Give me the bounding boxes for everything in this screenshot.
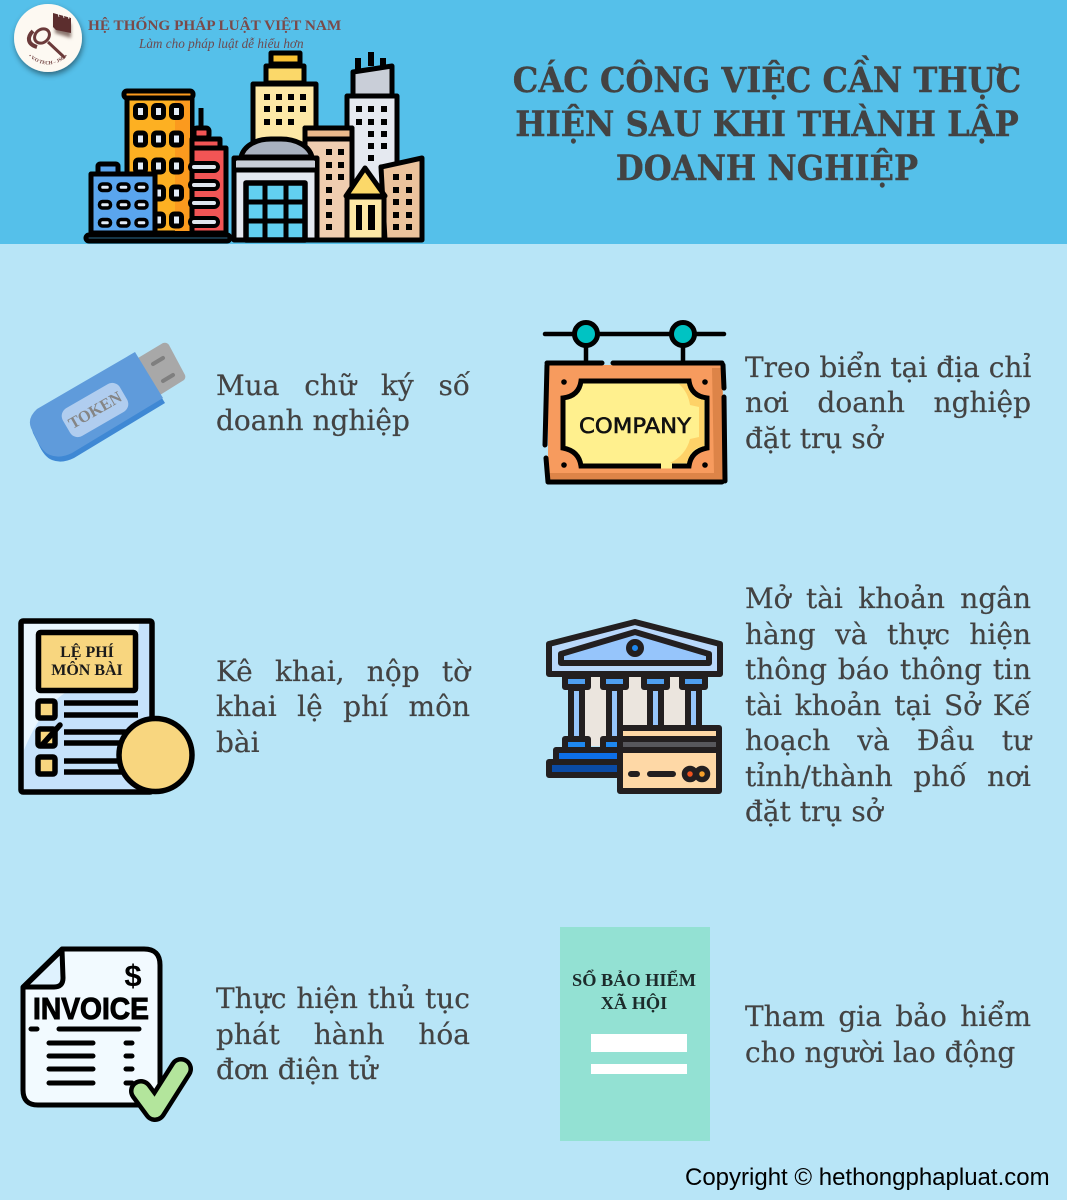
icon: USB token: TOKEN (65, 387, 125, 433)
icon: social insurance book: XÃ HỘI (601, 992, 667, 1013)
text: hang sign: nơi doanh nghiệp (745, 386, 1031, 419)
title: CÁC CÔNG VIỆC CẦN THỰC (513, 60, 1021, 101)
text: insurance: cho người lao động (745, 1036, 1015, 1068)
icon: logo seal (12, 4, 86, 78)
grey tower (347, 52, 397, 186)
small house (346, 168, 385, 240)
text: license fee: khai lệ phí môn (216, 690, 470, 723)
text: bank account: tỉnh/thành phố nơi (745, 760, 1031, 792)
icon: company sign: COMPANY (579, 414, 691, 438)
icon: city buildings (86, 52, 422, 241)
text: hang sign: đặt trụ sở (745, 422, 883, 454)
cream tower (253, 53, 316, 144)
icon: bank with card (549, 622, 720, 791)
right peach building (381, 158, 422, 240)
icon: invoice with check (23, 949, 181, 1110)
text: bank account: hoạch và Đầu tư (745, 724, 1031, 757)
brand slogan: Làm cho pháp luật dễ hiểu hơn (139, 36, 304, 51)
text: hang sign (745, 350, 1031, 454)
text: e-invoice: đơn điện tử (216, 1053, 377, 1086)
text: digital signature: Mua chữ ký số (216, 368, 470, 402)
text: hang sign: Treo biển tại địa chỉ (745, 350, 1031, 384)
header band (0, 0, 1067, 244)
title: HIỆN SAU KHI THÀNH LẬP (515, 104, 1019, 145)
icon: tax form with coin (21, 621, 192, 792)
peach middle building (305, 128, 352, 240)
text: bank account: Mở tài khoản ngân (745, 582, 1031, 615)
icon: social insurance book (560, 927, 710, 1141)
copyright: Copyright © hethongphapluat.com (685, 1164, 1050, 1191)
text: bank account: hàng và thực hiện (745, 618, 1031, 650)
text: license fee: Kê khai, nộp tờ (216, 654, 470, 688)
text: insurance (745, 1000, 1031, 1068)
blue block (91, 164, 155, 233)
icon: social insurance book: SỔ BẢO HIỂM (572, 969, 696, 990)
red tower (190, 108, 226, 233)
icon: logo seal: • V.O TECH – JSC • (29, 54, 66, 64)
icon: invoice with check: INVOICE (33, 991, 149, 1026)
text: license fee: bài (216, 726, 260, 758)
text: bank account (745, 582, 1032, 828)
text: bank account: thông báo thông tin (745, 653, 1031, 686)
text: bank account: tài khoản tại Sở Kế (745, 688, 1031, 722)
text: digital signature: doanh nghiệp (216, 404, 410, 437)
title (513, 55, 1021, 189)
icon: USB token (30, 343, 185, 462)
text: digital signature (216, 368, 470, 437)
domed building (234, 139, 317, 240)
icon: invoice with check: $ (124, 958, 142, 993)
text: license fee (216, 654, 472, 758)
title: DOANH NGHIỆP (616, 148, 918, 189)
text: insurance: Tham gia bảo hiểm (745, 1000, 1031, 1033)
orange tower (124, 91, 193, 233)
text: bank account: đặt trụ sở (745, 795, 883, 828)
icon: tax form with coin: MÔN BÀI (51, 660, 123, 679)
text: e-invoice: phát hành hóa (216, 1018, 470, 1050)
brand name: HỆ THỐNG PHÁP LUẬT VIỆT NAM (88, 17, 341, 34)
text: e-invoice: Thực hiện thủ tục (216, 982, 470, 1015)
text: e-invoice (216, 982, 470, 1086)
base (86, 235, 230, 241)
icon: company sign (545, 322, 725, 482)
icon: tax form with coin: LỆ PHÍ (60, 642, 114, 661)
